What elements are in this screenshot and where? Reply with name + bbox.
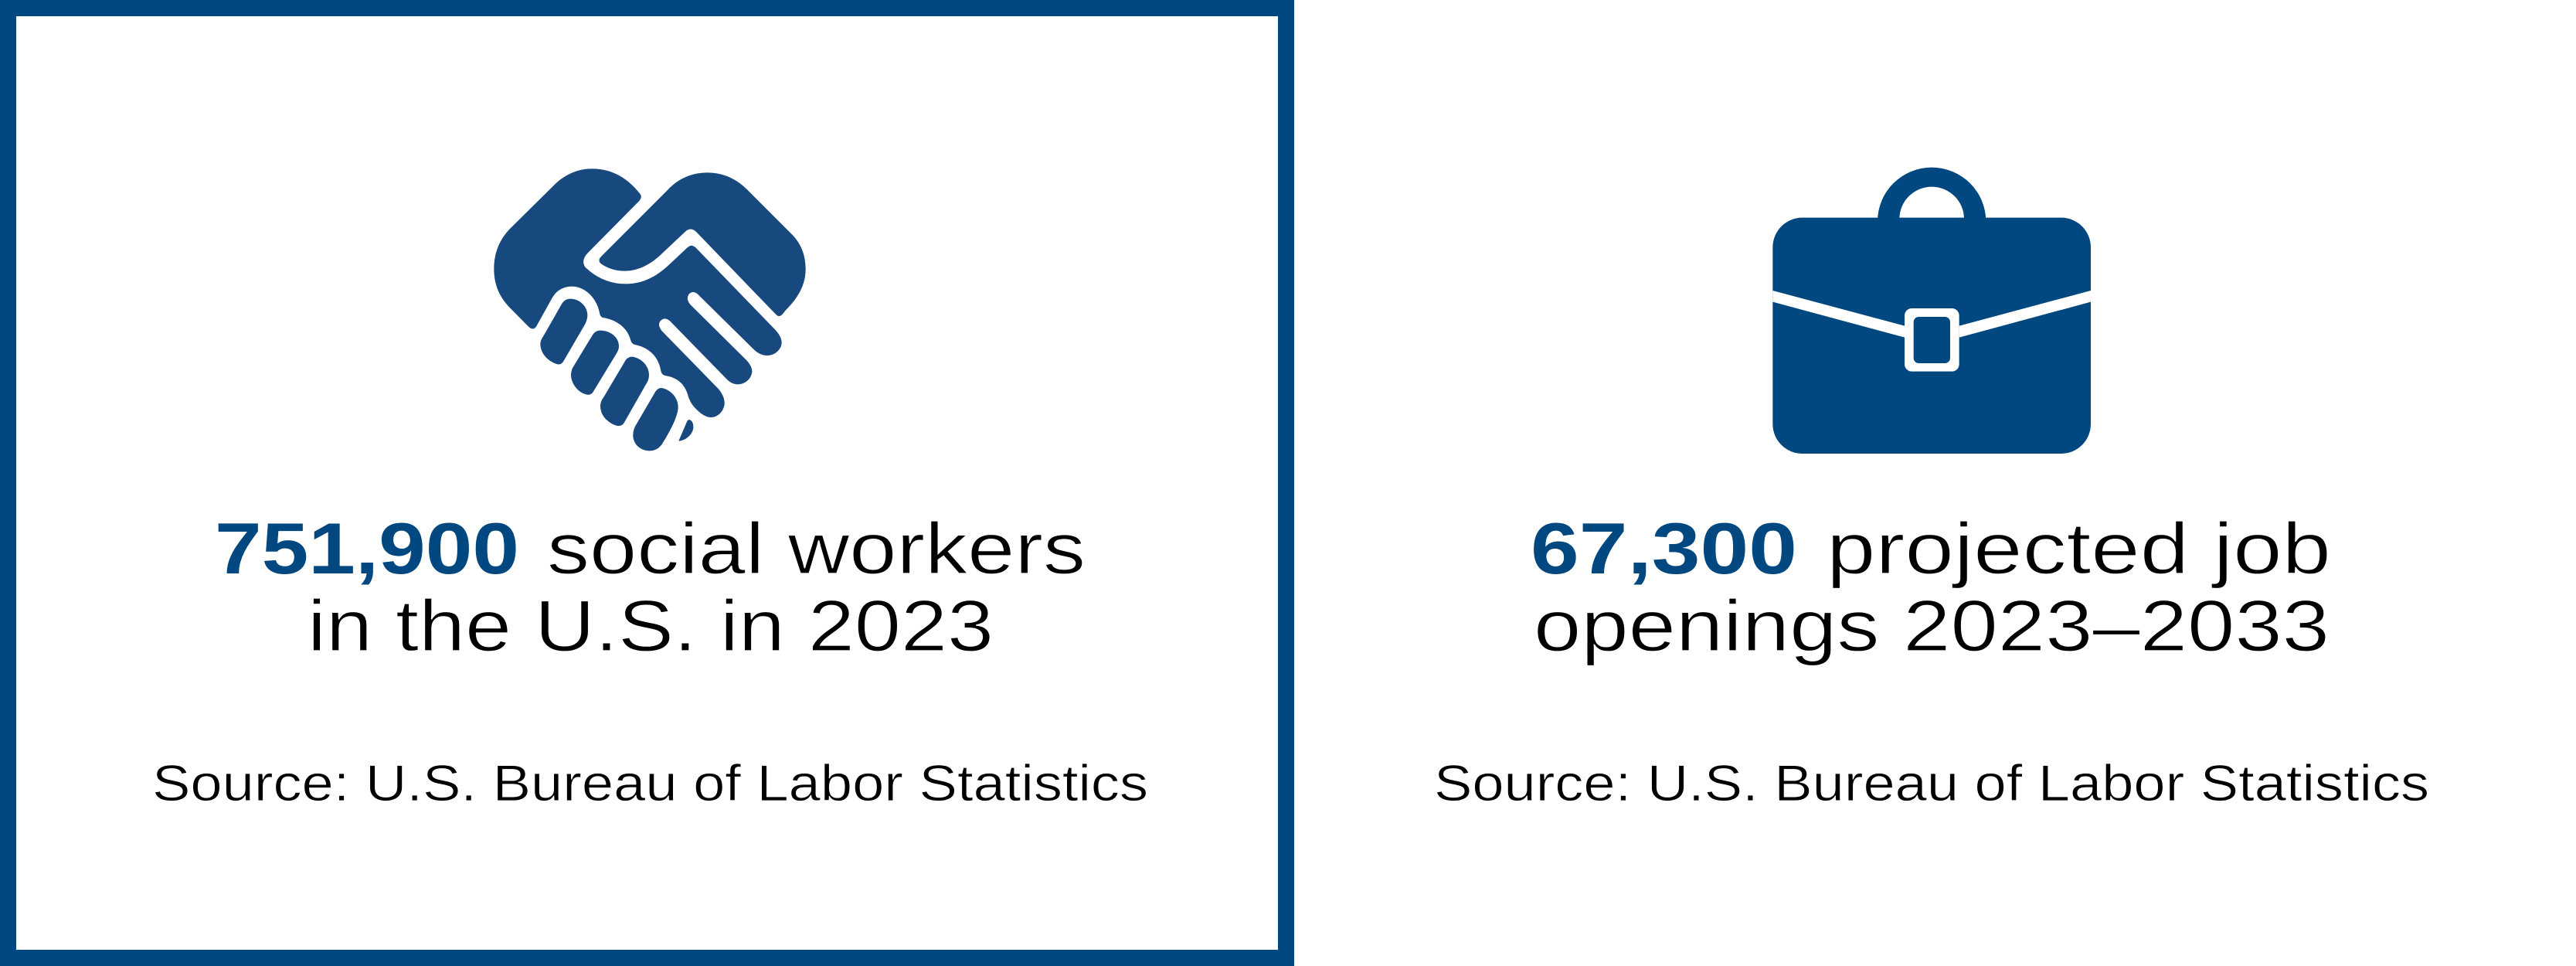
stat text: 751,900 social workers in the U.S. in 2023: 751,900 — [215, 508, 519, 589]
stat text: 67,300 projected job openings 2023–2033: 67,300 — [1531, 508, 1797, 589]
source text: Source: U.S. Bureau of Labor Statistics — [1434, 754, 2429, 811]
stat text: 67,300 projected job openings 2023–2033: projected job — [1827, 508, 2331, 589]
icon: briefcase — [1772, 168, 2091, 454]
stat text: 751,900 social workers in the U.S. in 2023 — [215, 508, 1086, 666]
source text: Source: U.S. Bureau of Labor Statistics — [152, 754, 1148, 811]
stat text: 67,300 projected job openings 2023–2033: openings 2023–2033 — [1534, 585, 2330, 666]
panel: job openings — [1434, 168, 2429, 811]
stat text: 751,900 social workers in the U.S. in 2023: in the U.S. in 2023 — [308, 585, 994, 666]
stat text: 67,300 projected job openings 2023–2033 — [1531, 508, 2331, 666]
icon: handshake — [494, 168, 806, 451]
stat text: 751,900 social workers in the U.S. in 2023: social workers — [547, 508, 1086, 589]
